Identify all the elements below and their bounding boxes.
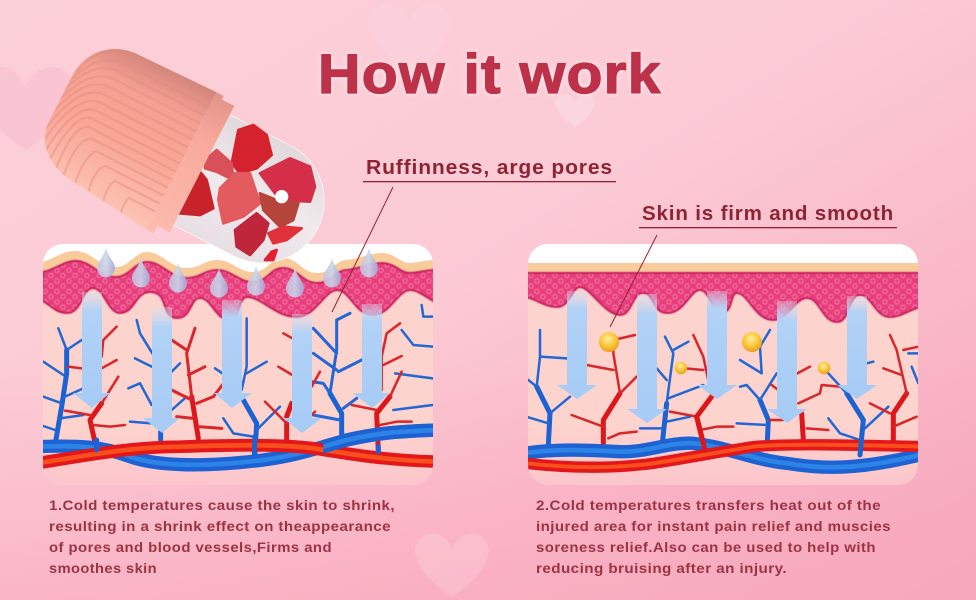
text block: step 1 xyxy=(49,497,395,576)
pink dermis cell layer, wavy xyxy=(41,261,435,320)
cooling arrows xyxy=(557,291,877,423)
cooling arrows xyxy=(73,292,390,433)
tan outer skin layer, flat xyxy=(528,263,918,272)
label: skin is firm and smooth: Skin is firm and smooth xyxy=(642,203,894,225)
golden orbs xyxy=(599,332,830,374)
blood vessels xyxy=(37,305,437,465)
glass capsule xyxy=(170,113,346,284)
water droplets xyxy=(97,248,378,298)
text block: step 2: reducing bruising after an injury. xyxy=(536,560,787,576)
text block: step 1: resulting in a shrink effect on theappearance xyxy=(49,518,391,534)
label: ruffinness, large pores xyxy=(332,157,616,312)
text block: step 2: soreness relief.Also can be used to help with xyxy=(536,539,876,555)
label: ruffinness, large pores: Ruffinness, arge pores xyxy=(366,157,613,179)
blood vessels xyxy=(520,330,927,467)
ice roller capsule xyxy=(44,49,325,263)
label: skin is firm and smooth xyxy=(610,203,897,327)
text block: step 1: 1.Cold temperatures cause the skin to shrink, xyxy=(49,497,395,513)
silicone holder with ribs xyxy=(44,49,234,233)
text block: step 1: smoothes skin xyxy=(49,560,157,576)
text block: step 1: of pores and blood vessels,Firms and xyxy=(49,539,332,555)
tan outer skin layer, wavy xyxy=(43,251,433,285)
title: How it work xyxy=(318,43,662,106)
text block: step 2: injured area for instant pain relief and muscies xyxy=(536,518,891,534)
panel: skin before treatment xyxy=(37,244,437,485)
panel: skin after treatment xyxy=(520,244,927,485)
text block: step 2: 2.Cold temperatures transfers heat out of the xyxy=(536,497,881,513)
text block: step 2 xyxy=(536,497,891,576)
flower petals xyxy=(179,125,315,260)
pink dermis cell layer, wavy xyxy=(526,273,920,322)
holder collar xyxy=(147,92,236,239)
